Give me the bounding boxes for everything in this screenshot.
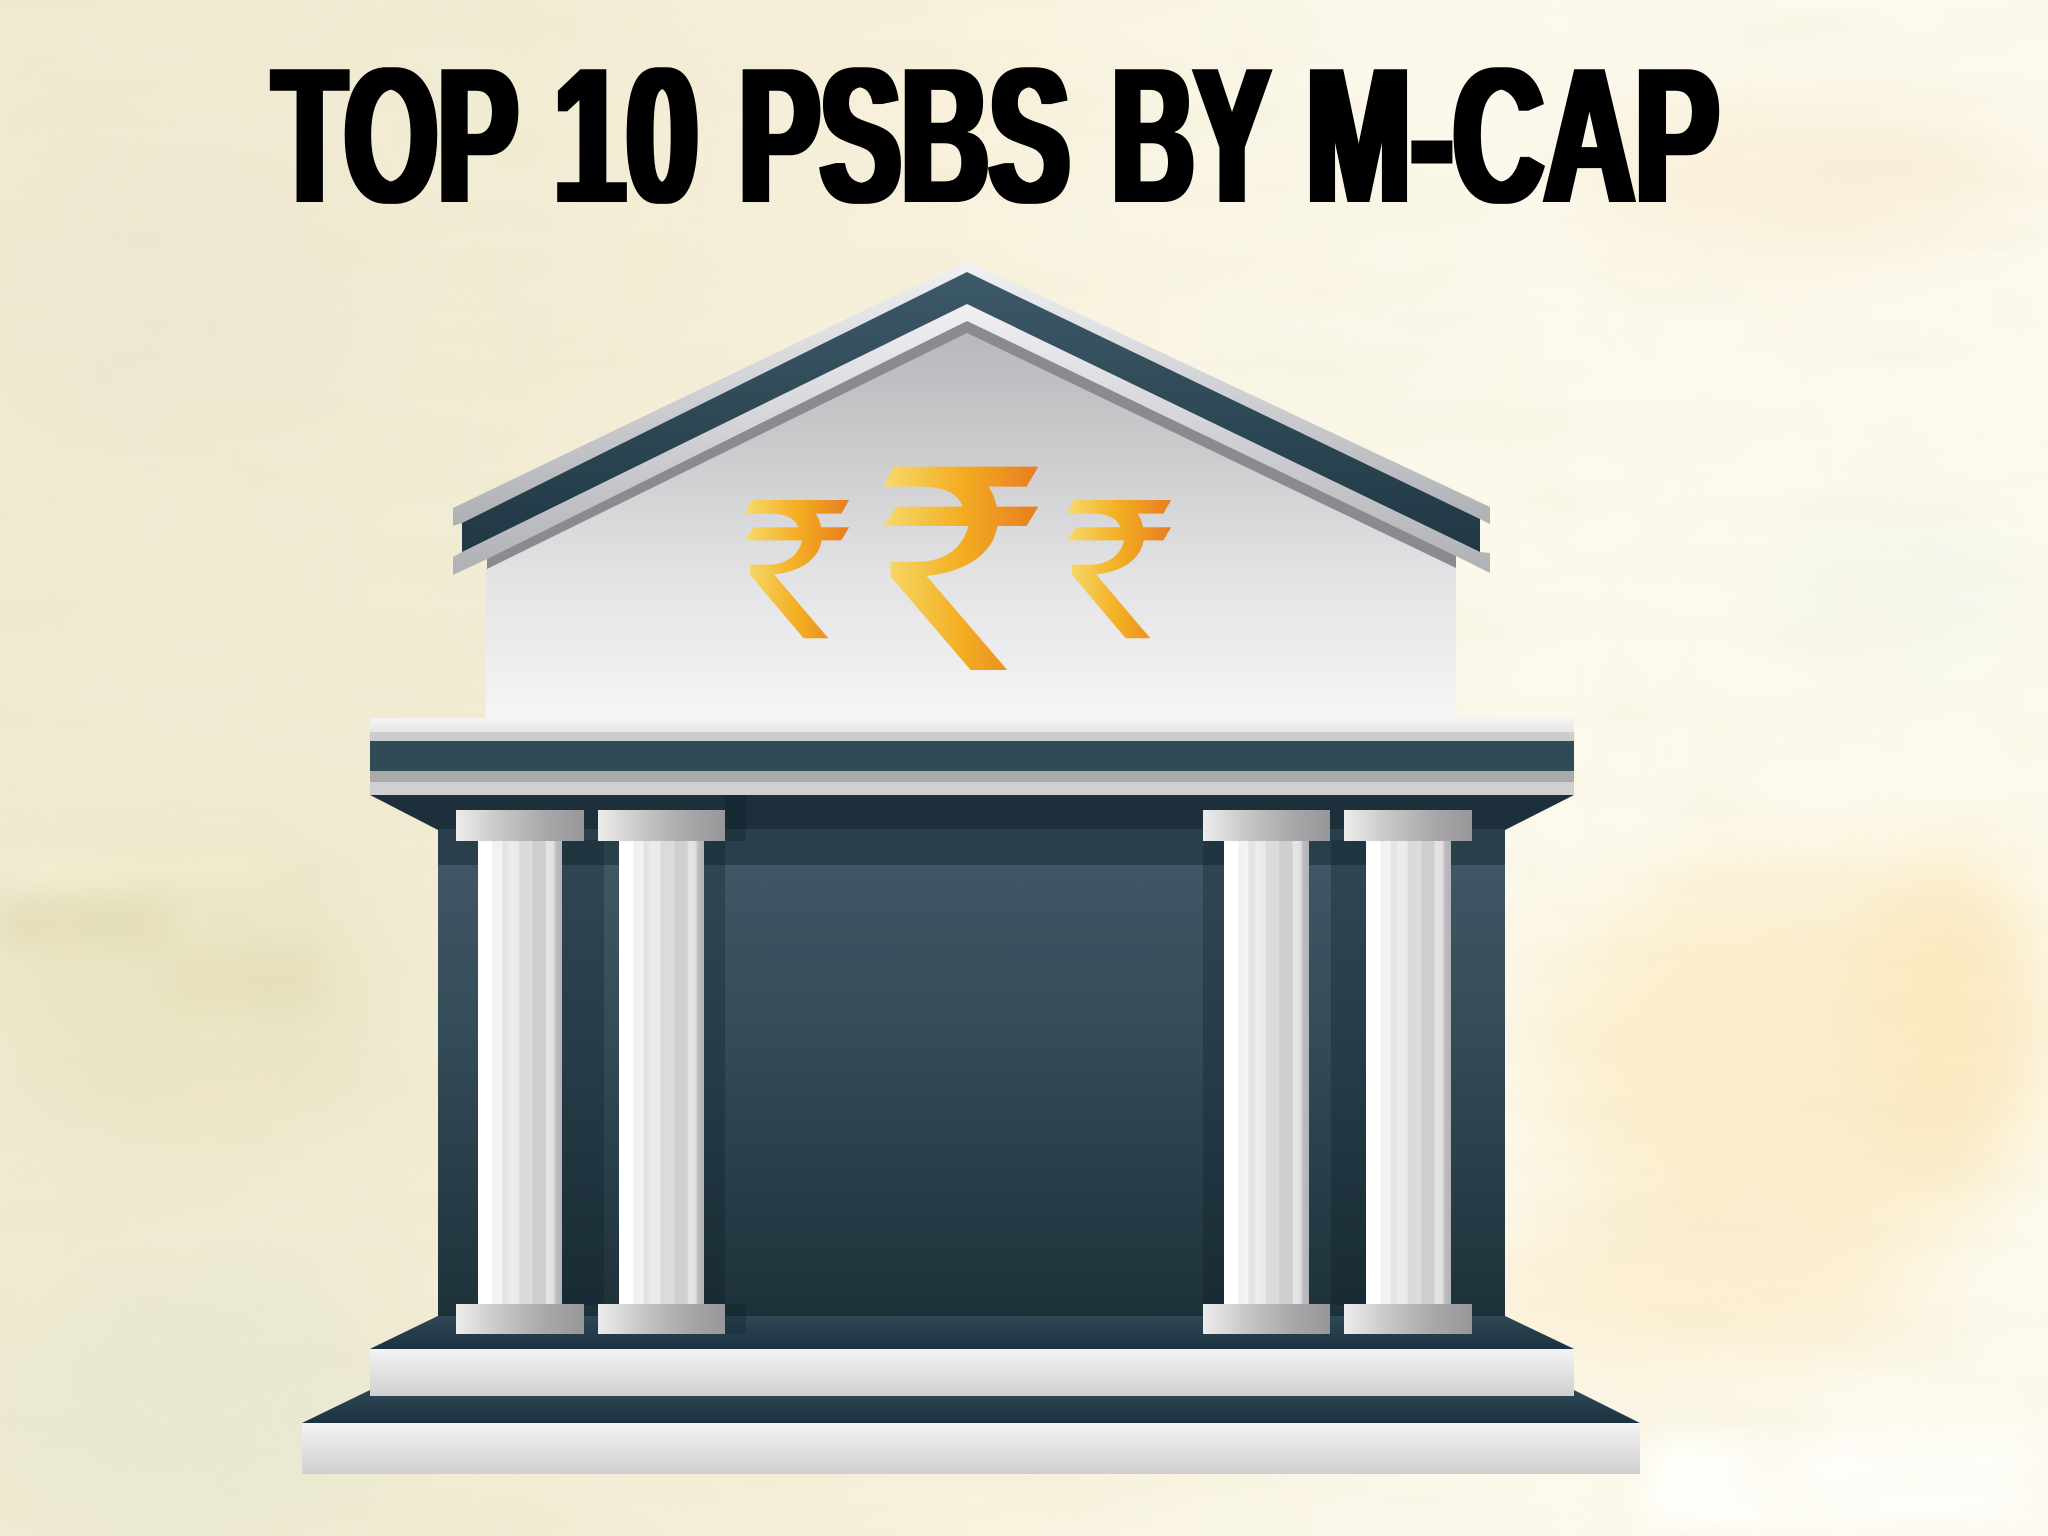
column shadows [562,795,1366,1334]
column 4 [1344,810,1472,1334]
column 3 [1203,810,1330,1334]
icon: right rupee [1067,500,1171,638]
roof: lower trim [453,304,1490,575]
icon: left rupee [745,500,849,638]
illustration: bank building [302,261,1640,1474]
title: M-CAP [1306,27,1719,243]
roof: dark band [462,272,1480,552]
icon: rupee symbols [745,467,1171,670]
column 2 [598,810,725,1334]
icon: centre rupee [883,467,1038,670]
lower step [302,1423,1640,1474]
pediment wall [486,332,1456,718]
title: BY [1112,27,1270,243]
roof: shadow band [487,321,1456,569]
title [273,27,1719,243]
upper step [370,1349,1574,1396]
portico facade [370,795,1574,1349]
roof: upper trim [453,261,1490,526]
title: PSBS [739,27,1070,243]
column 1 [456,810,584,1334]
entablature [370,718,1574,795]
lower step tread [302,1390,1640,1423]
title: TOP [273,27,518,243]
title: 10 [554,27,698,243]
